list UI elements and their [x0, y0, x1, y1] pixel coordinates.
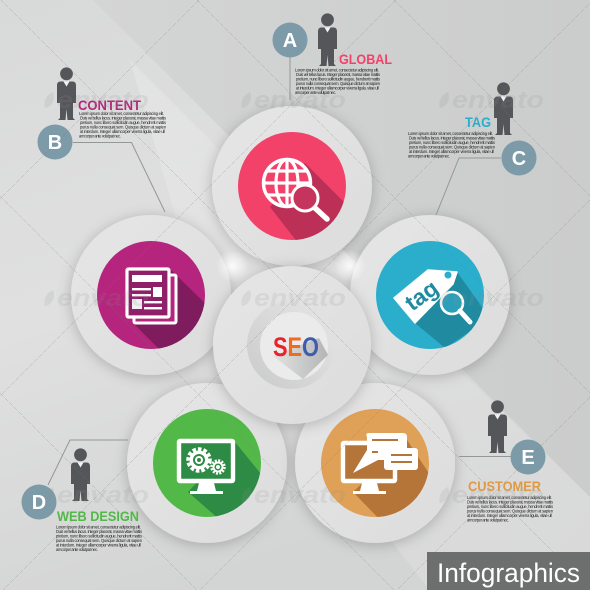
- circle: content disc: [71, 215, 231, 375]
- person B: [57, 67, 76, 120]
- text block: tag: amcorper ante volutpat nec.: [408, 154, 450, 158]
- text block: tag: Duis vel tellus lacus. Integer placerat, massa vitae mattis: [409, 136, 495, 140]
- text block: customer: Lorem ipsum dolor sit amet, consectetur adipiscing elit.: [467, 495, 552, 500]
- heading: CONTENT: CONTENT: [78, 97, 141, 113]
- heading: WEB DESIGN: WEB DESIGN: [57, 508, 139, 524]
- text block: customer: purus nulla consequat sem. Quisque dictum at sapien: [467, 508, 554, 514]
- icon: monitor with speech bubbles: [321, 409, 429, 517]
- center disc: SEO: [213, 266, 371, 424]
- circle: customer disc: [295, 383, 455, 543]
- person E: [488, 400, 507, 453]
- text block: content: purus nulla consequat sem. Quisque dictum at sapien: [80, 124, 167, 130]
- text block: tag: [408, 131, 496, 158]
- person A: [318, 13, 337, 66]
- badge B: [38, 124, 72, 160]
- text block: customer: amcorper ante volutpat nec.: [467, 518, 509, 522]
- text block: web design: at interdum. Integer ullamcorper viverra ligula, vitae ull: [56, 542, 141, 548]
- heading: SEO: SEO: [273, 332, 319, 362]
- text block: tag: Lorem ipsum dolor sit amet, consectetur adipiscing elit.: [408, 131, 493, 136]
- text block: tag: purus nulla consequat sem. Quisque dictum at sapien: [409, 144, 496, 150]
- badge B: B: [48, 132, 62, 154]
- watermark overlay: [44, 87, 544, 509]
- text block: content: Duis vel tellus lacus. Integer placerat, massa vitae mattis: [80, 116, 166, 120]
- text block: customer: pretium, nunc libero sollicitudin augue, hendrerit mattis: [467, 504, 553, 509]
- badge D: D: [32, 492, 46, 514]
- text block: web design: [56, 524, 143, 552]
- person C: [494, 82, 513, 135]
- heading: CUSTOMER: CUSTOMER: [468, 478, 541, 494]
- text block: web design: purus nulla consequat sem. Quisque dictum at sapien: [56, 538, 143, 543]
- text block: global: purus nulla consequat sem. Quisque dictum at sapien: [296, 81, 381, 86]
- connector lines: [48, 57, 511, 485]
- circle: tag disc: [350, 215, 510, 375]
- text block: web design: pretium, nunc libero sollicitudin augue, hendrerit mattis: [56, 534, 142, 538]
- label box: Infographics: Infographics: [437, 558, 580, 588]
- text block: content: Lorem ipsum dolor sit amet, consectetur adipiscing elit.: [79, 111, 164, 116]
- text block: tag: at interdum. Integer ullamcorper viverra ligula, vitae ull: [409, 149, 494, 154]
- badge C: C: [512, 148, 526, 170]
- text block: customer: [467, 495, 554, 522]
- text block: global: [295, 68, 381, 95]
- icon: monitor with gears: [153, 409, 261, 517]
- person D: [71, 448, 90, 501]
- icon: tag with magnifier: [376, 241, 490, 349]
- text block: global: amcorper ante volutpat nec.: [295, 90, 336, 95]
- icon: tag with magnifier: tag: [400, 275, 443, 316]
- circle: global disc: [212, 106, 372, 266]
- badge C: [502, 140, 536, 176]
- badge E: [510, 440, 546, 474]
- icon: newspaper: [97, 241, 205, 349]
- heading: GLOBAL: GLOBAL: [339, 51, 392, 67]
- circle: web design disc: [127, 383, 287, 543]
- text block: web design: amcorper ante volutpat nec.: [56, 547, 98, 552]
- text block: customer: Duis vel tellus lacus. Integer placerat, massa vitae mattis: [467, 500, 553, 504]
- badge D: [22, 484, 56, 520]
- text block: content: [79, 111, 167, 138]
- highlights between discs: [216, 250, 366, 282]
- icon: globe with magnifier: [238, 132, 346, 240]
- text block: content: at interdum. Integer ullamcorper viverra ligula, vitae ull: [80, 129, 165, 134]
- text block: web design: Duis vel tellus lacus. Integer placerat, massa vitae mattis: [56, 529, 142, 534]
- text block: content: pretium, nunc libero sollicitudin augue, hendrerit mattis: [80, 120, 166, 125]
- badge E: E: [521, 447, 535, 469]
- badge A: A: [283, 30, 297, 52]
- text block: global: Duis vel tellus lacus. Integer placerat, massa vitae mattis: [296, 72, 380, 77]
- badge A: [272, 22, 308, 58]
- text block: customer: at interdum. Integer ullamcorper viverra ligula, vitae ull: [467, 513, 552, 518]
- text block: content: amcorper ante volutpat nec.: [79, 134, 121, 138]
- text block: web design: Lorem ipsum dolor sit amet, consectetur adipiscing elit.: [56, 524, 141, 530]
- text block: tag: pretium, nunc libero sollicitudin augue, hendrerit mattis: [409, 140, 495, 145]
- heading: TAG: TAG: [465, 114, 491, 130]
- text block: global: Lorem ipsum dolor sit amet, consectetur adipiscing elit.: [295, 68, 379, 72]
- text block: global: at interdum. Integer ullamcorper viverra ligula, vitae ull: [296, 86, 379, 90]
- text block: global: pretium, nunc libero sollicitudin augue, hendrerit mattis: [296, 76, 380, 82]
